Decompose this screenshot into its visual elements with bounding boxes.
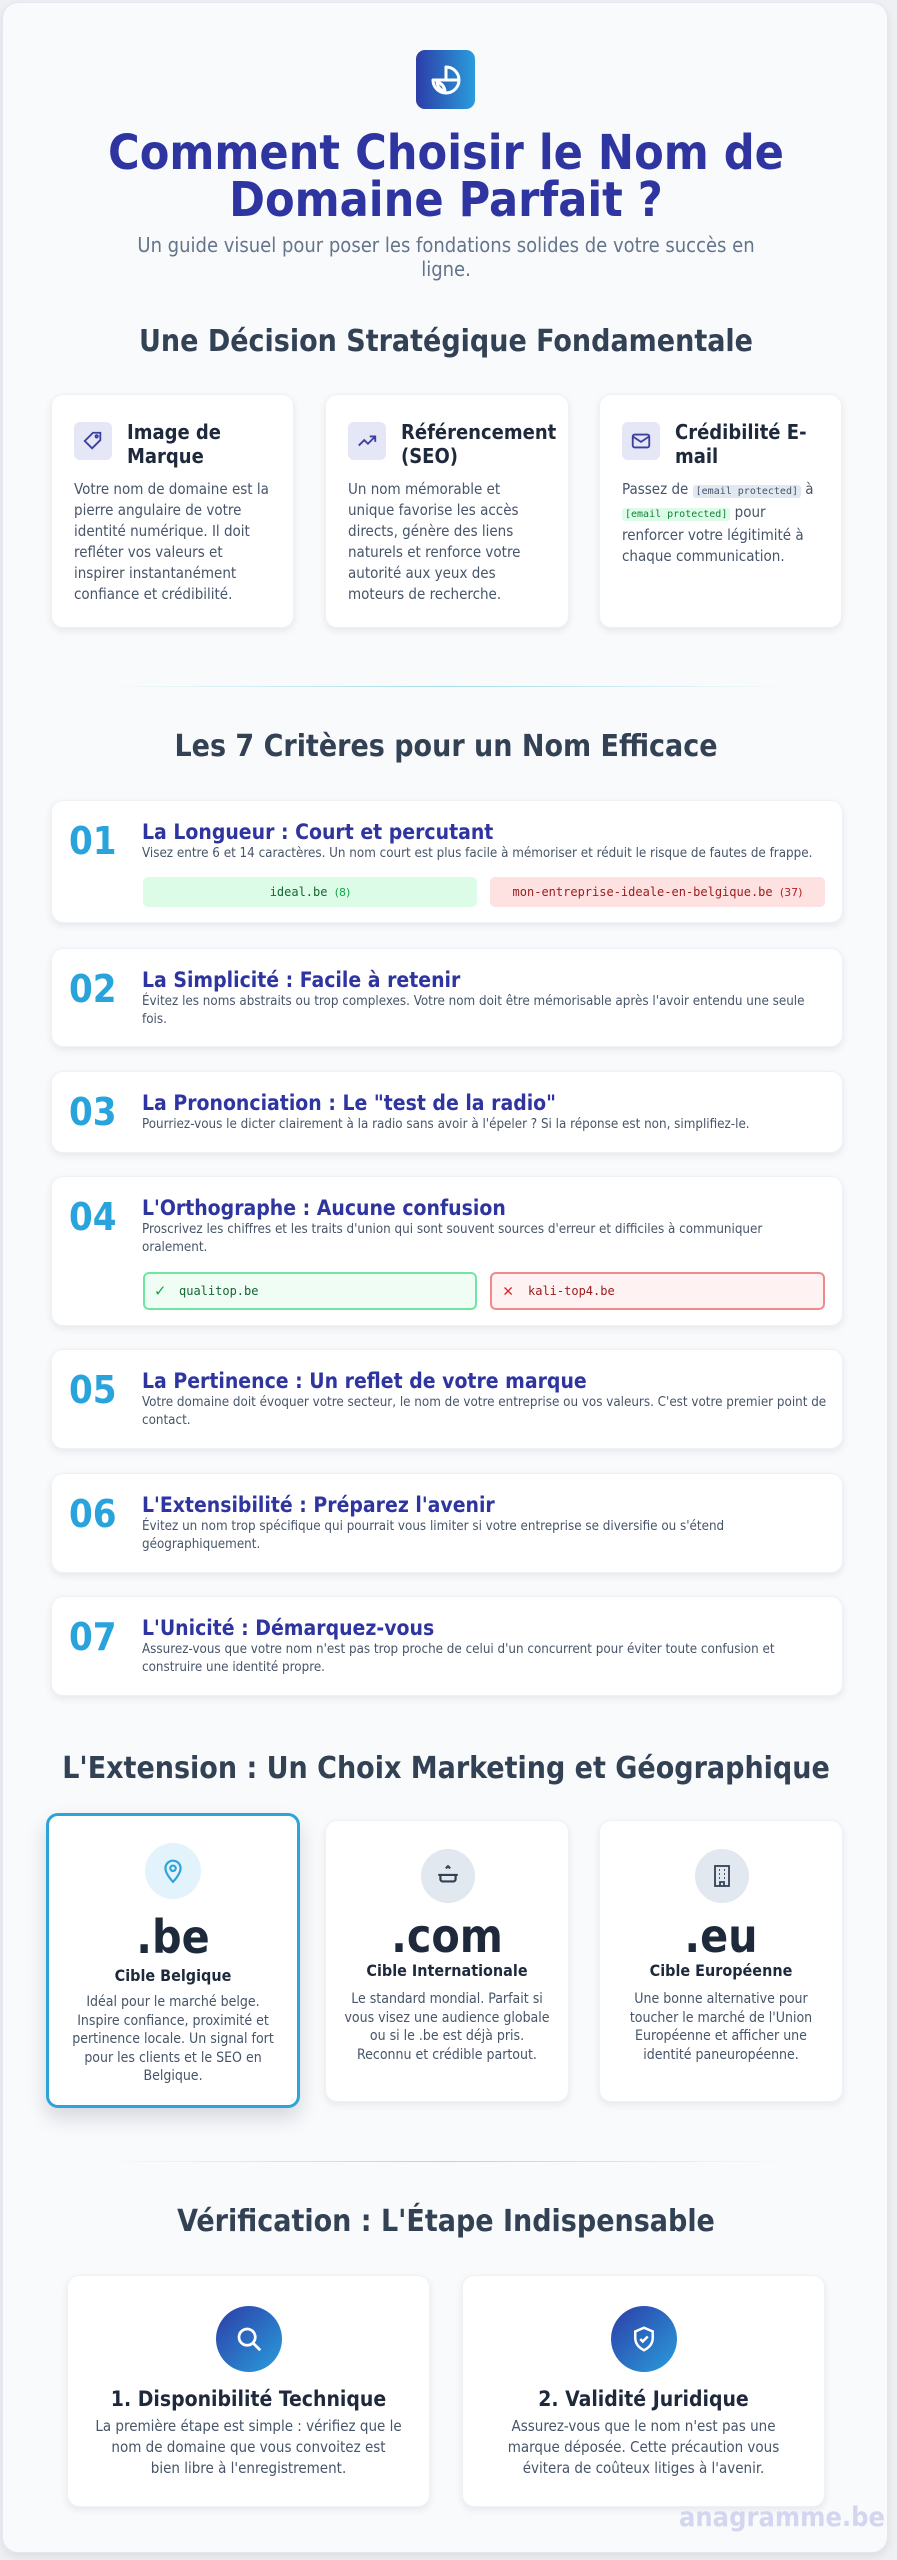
panel: validité juridique [462, 2275, 825, 2507]
card text: pierre angulaire de votre [74, 501, 241, 519]
criterion 07: Assurez-vous que votre nom n'est pas trop proche de celui d'un concurrent pour éviter toute confusion et [142, 1642, 775, 1657]
icon: tag [74, 422, 112, 460]
example good: qualitop.be [179, 1284, 258, 1298]
panel: validité juridique: marque déposée. Cette précaution vous [508, 2438, 779, 2456]
card text: chaque communication. [622, 547, 785, 565]
panel: .be: pertinence locale. Un signal fort [72, 2031, 274, 2047]
criterion 07: 07 [69, 1615, 117, 1659]
panel: .eu: Cible Européenne [650, 1961, 792, 1980]
criterion 06: 06 [69, 1492, 117, 1536]
criterion 05: Votre domaine doit évoquer votre secteur, le nom de votre entreprise ou vos valeurs. C'est votre premier point de [142, 1395, 826, 1410]
card title: (SEO) [401, 444, 458, 468]
panel: disponibilité technique: La première étape est simple : vérifiez que le [95, 2417, 402, 2435]
criterion 02: La Simplicité : Facile à retenir [142, 968, 460, 992]
example bad: kali-top4.be [528, 1284, 615, 1298]
panel: .com: Reconnu et crédible partout. [357, 2046, 537, 2062]
panel: .be [46, 1813, 300, 2108]
card text [622, 480, 814, 565]
card text [74, 480, 269, 603]
card title: Crédibilité E- [675, 420, 807, 444]
criterion 06: Évitez un nom trop spécifique qui pourrait vous limiter si votre entreprise se diversifie ou s'étend [142, 1519, 724, 1534]
criterion 04: Proscrivez les chiffres et les traits d'union qui sont souvent sources d'erreur et difficiles à communiquer [142, 1222, 762, 1237]
panel: validité juridique: évitera de coûteux litiges à l'avenir. [523, 2459, 764, 2477]
subtitle: Un guide visuel pour poser les fondations solides de votre succès en [137, 233, 755, 257]
panel: crédibilité email [599, 394, 842, 628]
card text [348, 480, 520, 603]
card title: Référencement [401, 420, 556, 444]
card text: confiance et crédibilité. [74, 585, 232, 603]
example good [143, 877, 477, 907]
criterion 02: Évitez les noms abstraits ou trop complexes. Votre nom doit être mémorisable après l'avoir entendu une seule [142, 994, 804, 1009]
criterion 05: contact. [142, 1413, 191, 1428]
criterion 05 [51, 1349, 843, 1449]
panel: image de marque [51, 394, 294, 628]
criterion 02: fois. [142, 1012, 167, 1027]
example good: ✓ [155, 1281, 165, 1301]
title [108, 125, 784, 228]
icon: shield [611, 2306, 677, 2372]
criterion 04: L'Orthographe : Aucune confusion [142, 1196, 506, 1220]
panel: .eu: identité paneuropéenne. [643, 2046, 799, 2062]
criterion 05: 05 [69, 1368, 117, 1412]
criterion 03: Pourriez-vous le dicter clairement à la radio sans avoir à l'épeler ? Si la réponse est non, simplifiez-le. [142, 1117, 750, 1132]
criterion 04 [51, 1176, 843, 1326]
criterion 01 [51, 800, 843, 923]
card text: Un nom mémorable et [348, 480, 500, 498]
criterion 06: L'Extensibilité : Préparez l'avenir [142, 1493, 495, 1517]
criterion 07: L'Unicité : Démarquez-vous [142, 1616, 434, 1640]
logo icon [416, 50, 475, 109]
panel: .eu: Européenne et afficher une [635, 2028, 807, 2044]
criterion 03: 03 [69, 1090, 117, 1134]
icon: globe bowl [421, 1849, 475, 1903]
panel: .eu: Une bonne alternative pour [634, 1991, 808, 2007]
panel: .be: Inspire confiance, proximité et [77, 2012, 269, 2028]
card title: Image de [127, 420, 221, 444]
criterion 03 [51, 1071, 843, 1153]
card title: Marque [127, 444, 204, 468]
card text: autorité aux yeux des [348, 564, 496, 582]
criterion 07: construire une identité propre. [142, 1660, 325, 1675]
icon: building [695, 1849, 749, 1903]
card text: moteurs de recherche. [348, 585, 501, 603]
card title [127, 420, 221, 468]
panel: validité juridique: 2. Validité Juridique [538, 2387, 749, 2411]
example bad: mon-entreprise-ideale-en-belgique.be (37) [513, 885, 802, 899]
panel: .com: ou si le .be est déjà pris. [370, 2028, 524, 2044]
criterion 04: oralement. [142, 1240, 207, 1255]
criterion 04: 04 [69, 1195, 117, 1239]
card text: naturels et renforce votre [348, 543, 520, 561]
card text: [email protected] pour [625, 503, 766, 521]
example bad [490, 1272, 825, 1310]
panel: référencement [325, 394, 569, 628]
criterion 02 [51, 948, 843, 1047]
panel: .eu [599, 1820, 843, 2102]
criterion 01: Visez entre 6 et 14 caractères. Un nom court est plus facile à mémoriser et réduit le risque de fautes de frappe. [142, 846, 812, 861]
panel: .eu: toucher le marché de l'Union [630, 2010, 812, 2026]
criterion 06 [51, 1473, 843, 1573]
heading: vérification: Vérification : L'Étape Indispensable [177, 2204, 715, 2239]
criterion 02: 02 [69, 967, 117, 1011]
card text: refléter vos valeurs et [74, 543, 223, 561]
example bad: ✕ [503, 1281, 513, 1301]
icon: search [216, 2306, 282, 2372]
title: Comment Choisir le Nom de [108, 125, 784, 181]
card text: identité numérique. Il doit [74, 522, 250, 540]
card text: inspirer instantanément [74, 564, 236, 582]
panel: .be: pour les clients et le SEO en [84, 2050, 262, 2066]
criterion 01: La Longueur : Court et percutant [142, 820, 493, 844]
panel: disponibilité technique: nom de domaine que vous convoitez est [111, 2438, 386, 2456]
subtitle [137, 233, 755, 281]
card title: mail [675, 444, 718, 468]
card text: Votre nom de domaine est la [74, 480, 269, 498]
icon: mail [622, 422, 660, 460]
panel: .be: Idéal pour le marché belge. [86, 1994, 260, 2010]
panel: .eu: .eu [684, 1909, 758, 1963]
card text: renforcer votre légitimité à [622, 526, 804, 544]
criterion 03: La Prononciation : Le "test de la radio" [142, 1091, 556, 1115]
criterion 05: La Pertinence : Un reflet de votre marque [142, 1369, 587, 1393]
card text: directs, génère des liens [348, 522, 513, 540]
panel: .com [325, 1820, 569, 2102]
panel: .be: Cible Belgique [115, 1966, 231, 1985]
criterion 01: 01 [69, 819, 117, 863]
panel: disponibilité technique: bien libre à l'enregistrement. [151, 2459, 346, 2477]
heading: décision stratégique: Une Décision Stratégique Fondamentale [139, 324, 753, 359]
panel: disponibilité technique [67, 2275, 430, 2507]
card text: unique favorise les accès [348, 501, 519, 519]
criterion 07 [51, 1596, 843, 1696]
panel: .com: .com [391, 1909, 503, 1963]
card text: Passez de [email protected] à [622, 480, 814, 498]
icon: location pin [145, 1843, 201, 1899]
panel: .be: .be [136, 1910, 210, 1964]
example bad [490, 877, 825, 907]
icon: trending [348, 422, 386, 460]
panel: disponibilité technique: 1. Disponibilité Technique [111, 2387, 386, 2411]
panel: .com: Cible Internationale [366, 1961, 528, 1980]
panel: validité juridique: Assurez-vous que le nom n'est pas une [511, 2417, 776, 2435]
subtitle: ligne. [421, 257, 471, 281]
example good [143, 1272, 477, 1310]
example good: ideal.be (8) [270, 885, 350, 899]
card title [401, 420, 556, 468]
title: Domaine Parfait ? [229, 172, 663, 228]
card title [675, 420, 807, 468]
heading: extension: L'Extension : Un Choix Marketing et Géographique [62, 1751, 830, 1786]
panel: .com: Le standard mondial. Parfait si [351, 1991, 543, 2007]
heading: 7 critères: Les 7 Critères pour un Nom Efficace [174, 729, 718, 764]
panel: .com: vous visez une audience globale [344, 2010, 550, 2026]
watermark: anagramme.be [679, 2502, 885, 2533]
criterion 06: géographiquement. [142, 1537, 260, 1552]
panel: .be: Belgique. [143, 2068, 203, 2084]
